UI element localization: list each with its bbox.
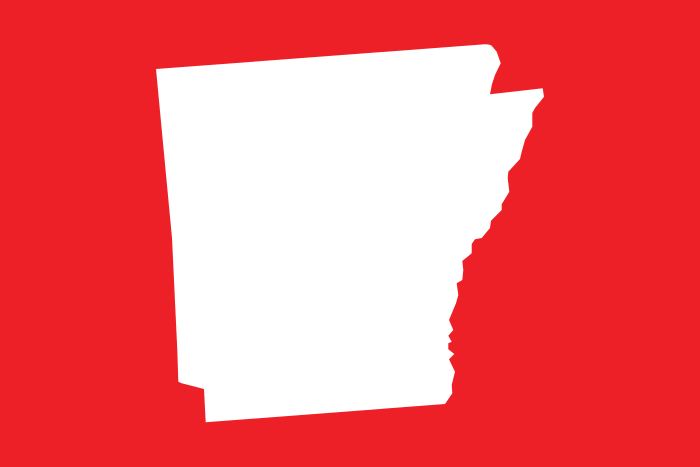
icon: Arkansas state silhouette — [156, 44, 544, 422]
